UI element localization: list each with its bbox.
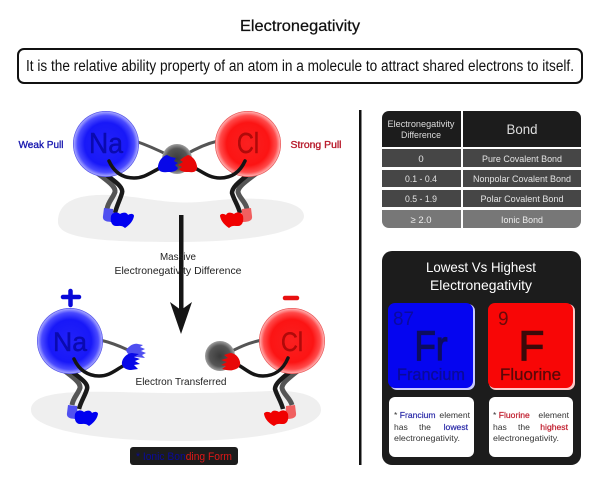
panel heading: Lowest Vs Highest bbox=[426, 259, 536, 275]
front arm Na bbox=[74, 359, 123, 376]
tile: fluorine: F bbox=[519, 322, 544, 369]
bond table: 0 bbox=[418, 154, 424, 165]
front leg Na bbox=[103, 172, 122, 213]
front arm Cl bbox=[195, 161, 245, 178]
bond table: 0.5 - 1.9 bbox=[405, 194, 437, 205]
label: strong pull: Strong Pull bbox=[290, 140, 342, 151]
atom: Cl bbox=[259, 308, 325, 374]
hand: red bbox=[221, 353, 240, 370]
arrow caption: Massive bbox=[160, 252, 196, 263]
table header bbox=[382, 111, 461, 147]
note: fluorine: highest bbox=[540, 422, 569, 432]
title: Electronegativity bbox=[240, 18, 360, 35]
bond table: Difference bbox=[401, 130, 441, 141]
front leg Cl bbox=[232, 172, 251, 213]
shared electron bbox=[162, 144, 192, 174]
label: Na: Na bbox=[53, 327, 88, 357]
tile: fluorine: 9 bbox=[498, 309, 509, 330]
bond table bbox=[382, 111, 581, 228]
label: Na: Na bbox=[89, 128, 124, 160]
note: francium: the bbox=[419, 422, 431, 432]
bond table: ≥ 2.0 bbox=[410, 215, 432, 226]
foot back Cl bbox=[285, 405, 296, 419]
minus sign bbox=[285, 296, 297, 300]
hand: blue front bbox=[122, 353, 140, 370]
bond table: 0.1 - 0.4 bbox=[405, 174, 437, 185]
note: francium: electronegativity. bbox=[394, 433, 460, 443]
atom: Na bbox=[73, 111, 139, 177]
atom: Cl bbox=[215, 111, 281, 177]
definition box bbox=[18, 49, 582, 83]
note: francium: has bbox=[394, 422, 408, 432]
note: fluorine: element bbox=[538, 410, 570, 420]
tile: francium: 87 bbox=[393, 309, 414, 330]
note: fluorine: has bbox=[493, 422, 507, 432]
shadow: top ground bbox=[58, 195, 304, 242]
tile: francium: Fr bbox=[414, 322, 448, 369]
bond table: Bond bbox=[506, 121, 538, 137]
diagram: electron transferred bbox=[37, 308, 325, 426]
tile: francium: Francium bbox=[397, 365, 465, 384]
tile: fluorine bbox=[488, 303, 575, 390]
front arm Cl bbox=[240, 358, 288, 376]
front arm Na bbox=[109, 161, 160, 178]
back leg Cl bbox=[238, 172, 258, 209]
hand: blue bbox=[158, 155, 178, 172]
arrow caption: Electronegativity Difference bbox=[114, 266, 242, 277]
shadow: bottom ground bbox=[31, 391, 321, 441]
note: francium: * Francium bbox=[394, 410, 436, 420]
row 2 bbox=[382, 170, 461, 187]
back arms bbox=[135, 141, 218, 156]
note: fluorine bbox=[489, 397, 573, 457]
ionic bonding form label bbox=[130, 447, 238, 465]
bond table: Nonpolar Covalent Bond bbox=[473, 174, 571, 185]
panel heading: Electronegativity bbox=[430, 277, 532, 293]
foot front Cl bbox=[264, 410, 288, 426]
note: fluorine: * Fluorine bbox=[493, 410, 530, 420]
back leg Na bbox=[61, 368, 80, 405]
plus sign bbox=[63, 291, 79, 305]
front leg Na bbox=[68, 368, 87, 409]
note: francium bbox=[389, 397, 474, 457]
diagram: covalent pull bbox=[73, 111, 281, 228]
back leg Cl bbox=[282, 368, 301, 405]
hand: blue back bbox=[126, 344, 146, 358]
label: weak pull: Weak Pull bbox=[18, 140, 64, 151]
hand: red bbox=[178, 155, 197, 172]
foot front Cl bbox=[220, 212, 243, 228]
back arms bbox=[100, 340, 262, 351]
note: fluorine: electronegativity. bbox=[493, 433, 559, 443]
note: francium: element bbox=[439, 410, 471, 420]
panel heading bbox=[426, 259, 536, 293]
bond table: Pure Covalent Bond bbox=[482, 154, 562, 165]
foot front Na bbox=[111, 212, 134, 228]
arrow caption bbox=[114, 252, 242, 277]
front leg Cl bbox=[275, 368, 294, 409]
panel: lowest vs highest bbox=[382, 251, 581, 465]
atom: Na bbox=[37, 308, 103, 374]
row 3 bbox=[382, 190, 461, 207]
tile: fluorine: Fluorine bbox=[500, 365, 561, 384]
foot back Na bbox=[67, 405, 78, 419]
row 4 bbox=[382, 210, 461, 228]
bond table: Polar Covalent Bond bbox=[480, 194, 564, 205]
label: Cl: Cl bbox=[237, 128, 259, 160]
back leg Na bbox=[96, 172, 115, 209]
foot front Na bbox=[75, 410, 98, 426]
bond table: Ionic Bond bbox=[501, 215, 543, 226]
row 1 bbox=[382, 149, 461, 167]
transferred electron bbox=[205, 341, 235, 371]
bond table: Electronegativity bbox=[388, 119, 455, 130]
ionic bonding form label: * Ionic Bonding Form bbox=[136, 451, 232, 463]
vertical divider bbox=[359, 110, 362, 465]
foot back Na bbox=[103, 208, 114, 222]
label: electron transferred: Electron Transferred bbox=[136, 377, 226, 388]
arrow bbox=[170, 215, 192, 334]
label: Cl: Cl bbox=[281, 327, 303, 357]
foot back Cl bbox=[241, 208, 252, 222]
note: francium: lowest bbox=[444, 422, 469, 432]
tile: francium bbox=[388, 303, 475, 390]
note: fluorine: the bbox=[518, 422, 530, 432]
